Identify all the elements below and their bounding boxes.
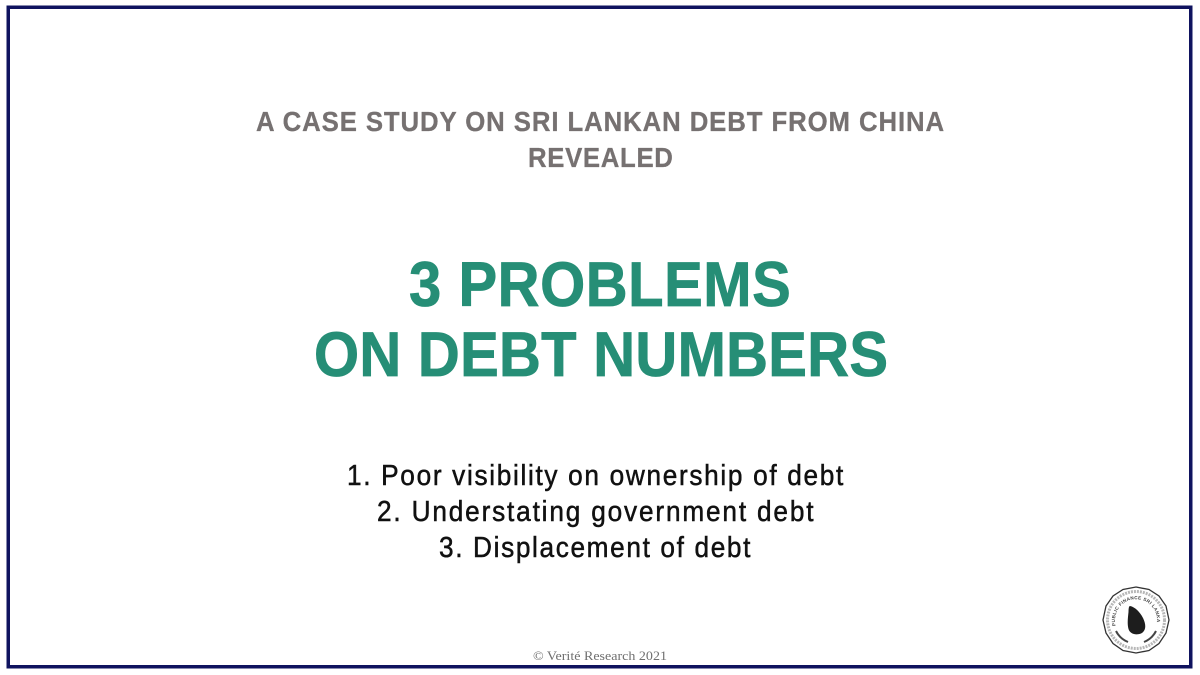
title [314,249,888,390]
logo: Public Finance Sri Lanka seal: PUBLIC FINANCE SRI LANKA [1112,596,1160,626]
list of three problems: 2. Understating government debt [377,495,814,527]
subtitle: A CASE STUDY ON SRI LANKAN DEBT FROM CHINA [256,106,944,137]
subtitle: REVEALED [528,142,673,173]
list of three problems [347,459,844,563]
title: ON DEBT NUMBERS [314,319,888,390]
list of three problems: 1. Poor visibility on ownership of debt [347,459,844,491]
subtitle [256,106,944,173]
list of three problems: 3. Displacement of debt [439,531,751,563]
title: 3 PROBLEMS [409,249,791,320]
icon: Sri Lanka island [1128,606,1145,634]
logo: Public Finance Sri Lanka seal [1102,586,1170,654]
seal bottom ornaments [1116,631,1156,642]
copyright footer: © Verité Research 2021 [533,648,667,663]
